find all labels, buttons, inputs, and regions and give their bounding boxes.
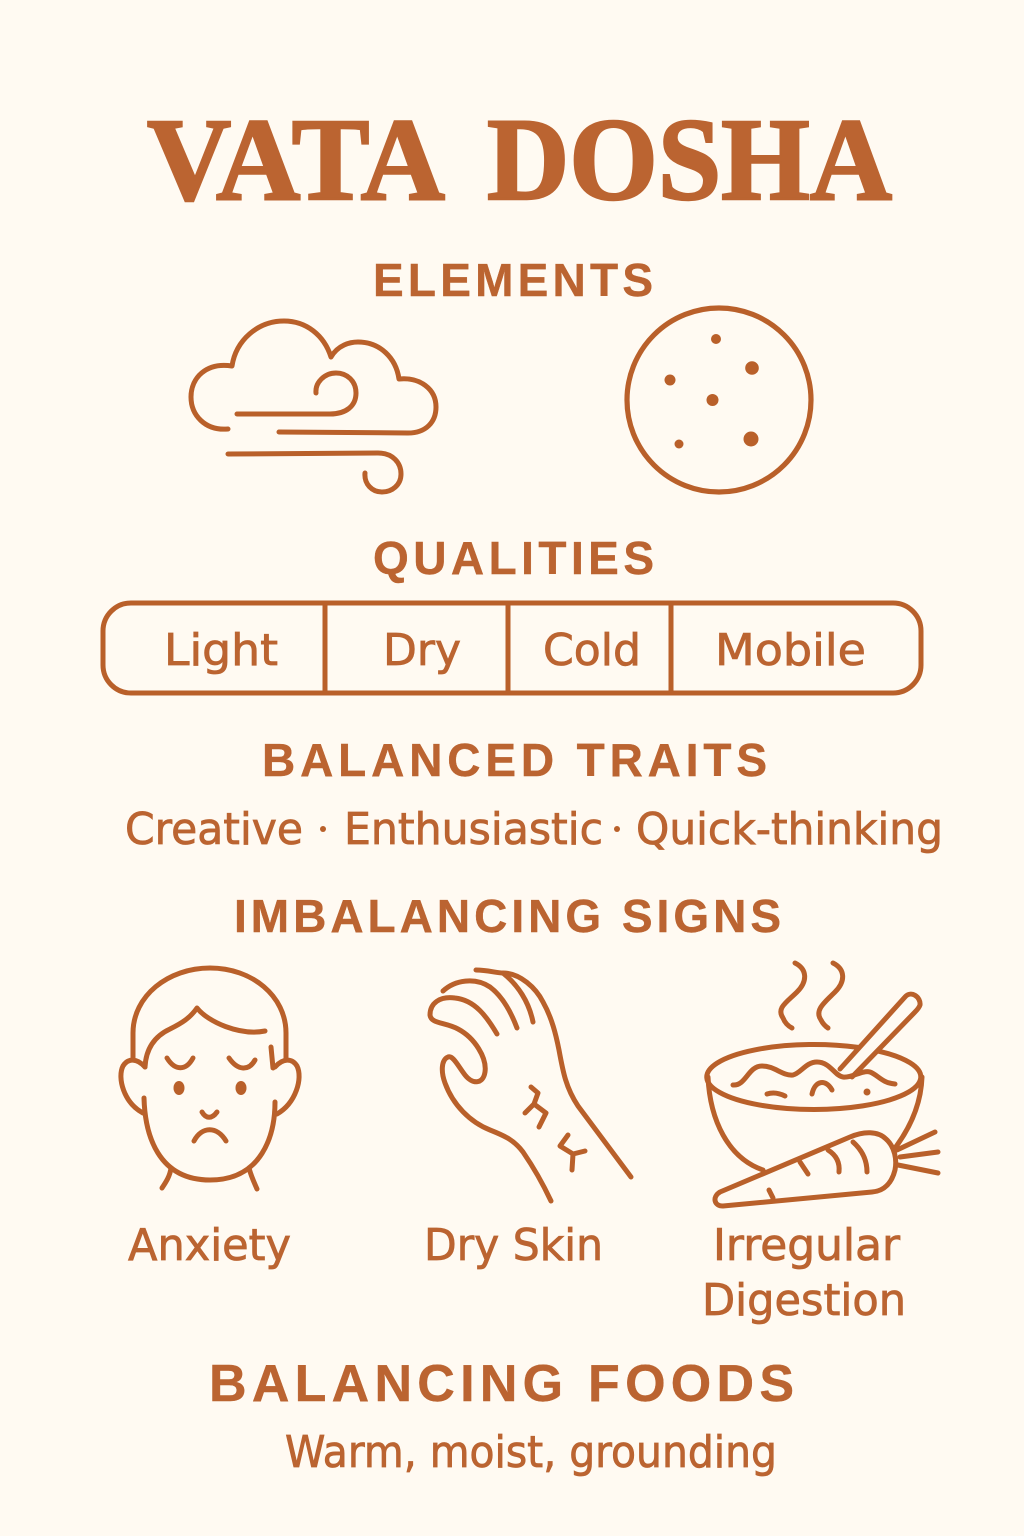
quality: dry: Dry (383, 625, 461, 676)
foods description: Warm, moist, grounding (285, 1427, 777, 1478)
icon: ether circle with dots (627, 308, 811, 492)
trait: enthusiastic: Enthusiastic (344, 804, 603, 855)
trait: creative: Creative (125, 804, 303, 855)
quality: light: Light (164, 625, 278, 676)
title: DOSHA (487, 94, 892, 225)
heading: imbalancing signs: IMBALANCING SIGNS (234, 890, 781, 942)
section: balanced traits (125, 734, 943, 855)
heading: elements: ELEMENTS (373, 254, 653, 306)
section: qualities (103, 532, 921, 693)
trait: quick-thinking: Quick-thinking (636, 804, 943, 855)
heading: qualities: QUALITIES (373, 532, 654, 584)
icon: anxious face (121, 968, 299, 1189)
label: irregular digestion: Digestion (702, 1275, 906, 1326)
separator dot (320, 826, 326, 832)
section: balancing foods (209, 1355, 794, 1478)
title: VATA (147, 94, 445, 225)
title (147, 94, 892, 225)
label: anxiety: Anxiety (128, 1220, 291, 1271)
icon: wind and cloud (air) (191, 321, 436, 492)
section: imbalancing signs (121, 890, 938, 1326)
label: irregular digestion (702, 1220, 906, 1326)
quality: mobile: Mobile (715, 625, 866, 676)
label: dry skin: Dry Skin (424, 1220, 603, 1271)
quality: cold: Cold (543, 625, 641, 676)
icon: dry hand (430, 970, 631, 1201)
icon: bowl and carrot (707, 963, 938, 1206)
heading: balanced traits: BALANCED TRAITS (262, 734, 767, 786)
separator dot (614, 826, 620, 832)
heading: balancing foods: BALANCING FOODS (209, 1355, 794, 1413)
label: irregular digestion: Irregular (713, 1220, 901, 1271)
section: elements (191, 254, 811, 492)
qualities bar outline (103, 603, 921, 693)
